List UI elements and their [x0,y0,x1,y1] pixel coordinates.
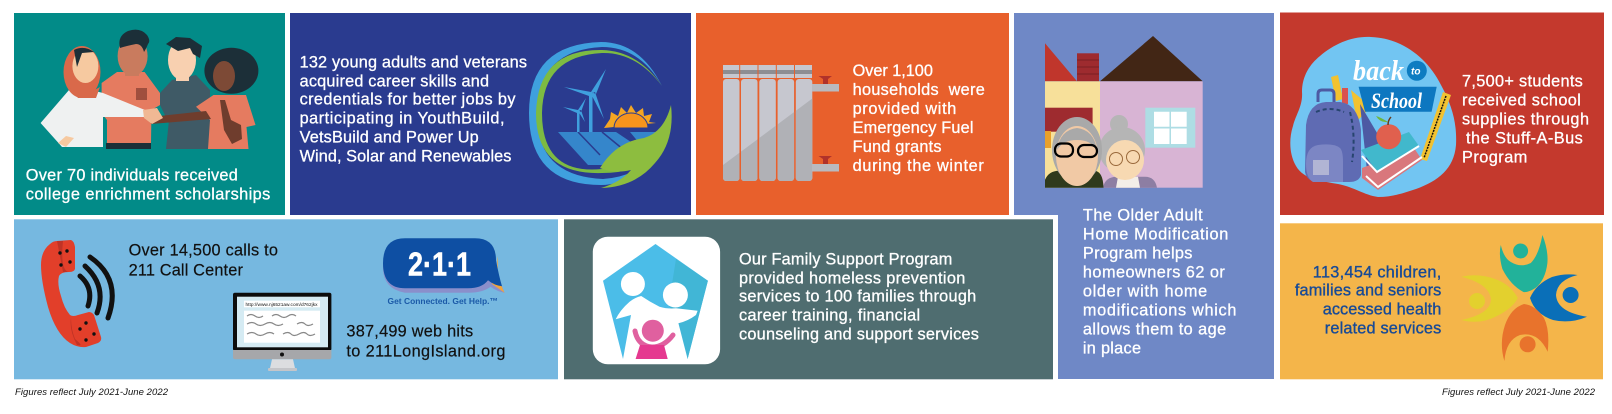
text: home modification: The Older Adult [1083,206,1203,224]
icon: desktop monitor [233,293,331,371]
text: web hits: to 211LongIsland.org [346,343,505,361]
text: career skills: acquired career skills and [300,72,489,90]
text: home modification [1083,206,1236,357]
icon: back to school: to [1411,66,1420,78]
icon: family in home [593,237,720,364]
text: scholarships: college enrichment scholarships [26,186,270,204]
panel: family support [564,219,1053,379]
text: fuel fund: households were [853,81,985,99]
footnote right: Figures reflect July 2021-June 2022 [1442,387,1596,398]
text: career skills: participating in YouthBuild, [300,109,504,127]
text: school supplies: 7,500+ students [1462,73,1583,91]
text: home modification: homeowners 62 or [1083,263,1225,281]
panel: health services [1280,223,1603,379]
panel: 211 call center [14,219,558,379]
text: fuel fund: Fund grants [853,138,942,156]
icon: older couple in front of a house [1045,36,1203,188]
text: home modification: in place [1083,339,1141,357]
text: school supplies: received school [1462,92,1581,110]
text: fuel fund: Over 1,100 [853,62,933,80]
text: web hits [346,323,505,361]
text: career skills: credentials for better jobs by [300,91,516,109]
icon: four people joining hands [41,30,258,149]
panel: older adult home modification [1014,13,1274,379]
text: school supplies: Program [1462,149,1527,167]
text: health services: families and seniors [1295,282,1441,300]
text: calls [129,241,278,280]
text: scholarships: Over 70 individuals received [26,167,238,185]
text: home modification: older with home [1083,282,1207,300]
text: career skills: VetsBuild and Power Up [300,128,479,146]
text: home modification: allows them to age [1083,320,1226,338]
text: family support: career training, financial [739,307,920,325]
text: calls: 211 Call Center [129,262,243,280]
icon: back to school [1290,37,1456,197]
footnote left: Figures reflect July 2021-June 2022 [15,387,169,398]
icon: renewable energy logo [529,42,672,188]
text: family support: services to 100 families through [739,288,976,306]
text: school supplies [1462,73,1589,167]
icon: radiator [723,65,839,181]
text: career skills: 132 young adults and veterans [300,53,527,71]
text: career skills: Wind, Solar and Renewables [300,147,511,165]
text: fuel fund: Emergency Fuel [853,119,974,137]
icon: four figures in a circle [1461,235,1587,361]
panel: emergency fuel [696,13,1009,215]
icon: 211 logo [383,238,505,306]
text: school supplies: supplies through [1462,111,1589,129]
icon: 211 logo: 2·1·1 [408,246,471,283]
text: home modification: modifications which [1083,301,1236,319]
icon: back to school: back [1353,56,1404,87]
text: fuel fund: provided with [853,100,956,118]
text: family support: counseling and support services [739,326,979,344]
text: health services: 113,454 children, [1313,263,1441,281]
icon: desktop monitor: http://www.nj6521aw.com/d762jkx [246,302,318,307]
text: career skills [300,53,527,165]
panel: career skills [290,13,691,215]
panel: college scholarships [14,13,285,215]
text: family support [739,250,979,344]
text: fuel fund [853,62,985,175]
text: fuel fund: during the winter [853,157,984,175]
icon: back to school: School [1371,88,1423,113]
panel: stuff-a-bus [1280,12,1604,215]
icon: red telephone [41,240,112,347]
text: home modification: Home Modification [1083,225,1228,243]
text: home modification: Program helps [1083,244,1192,262]
icon: 211 logo: Get Connected. Get Help.™ [388,296,498,306]
text: family support: provided homeless prevention [739,269,965,287]
text: school supplies: the Stuff-A-Bus [1466,130,1583,148]
text: calls: Over 14,500 calls to [129,241,278,259]
text: scholarships [26,167,270,204]
text: health services [1295,263,1441,338]
text: family support: Our Family Support Program [739,250,952,268]
text: web hits: 387,499 web hits [346,323,473,341]
text: health services: related services [1325,320,1441,338]
text: health services: accessed health [1323,301,1441,319]
